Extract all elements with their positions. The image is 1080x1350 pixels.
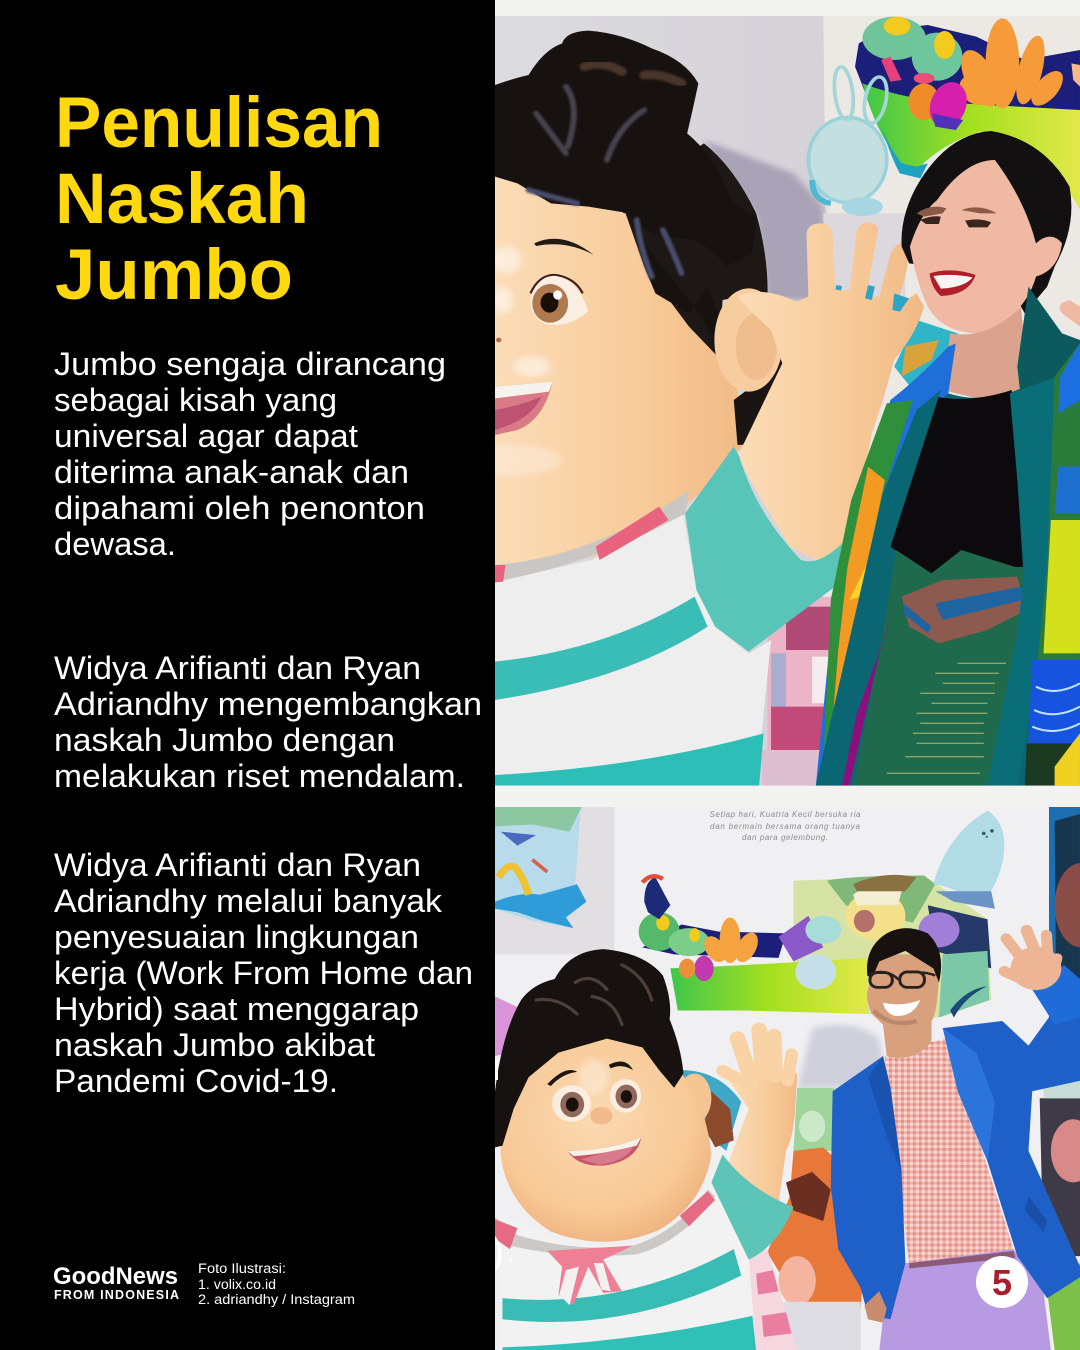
mascot hair (495, 30, 700, 303)
text block: paragraph 2: Adriandhy mengembangkan (54, 686, 482, 722)
page number badge: 5 (992, 1262, 1012, 1303)
wall caption illustration (639, 811, 1004, 1018)
mascot plaid behind (762, 597, 838, 787)
wall caption text: dan para gelembung. (742, 833, 828, 842)
mascot sleeve (685, 447, 846, 652)
mascot head (495, 177, 749, 567)
mascot plaid sleeve (749, 1249, 797, 1350)
text block: paragraph 3: Pandemi Covid-19. (54, 1063, 338, 1099)
wall (495, 16, 1080, 786)
page number badge (976, 1256, 1028, 1308)
mascot hair back (618, 143, 768, 363)
text block: paragraph 3: Adriandhy melalui banyak (54, 883, 443, 919)
text block: paragraph 1: dewasa. (54, 526, 176, 562)
mascot mouth (495, 382, 553, 435)
woman jacket left lapel (816, 390, 941, 786)
title: Naskah (55, 160, 309, 239)
woman face (910, 160, 1062, 400)
photo 1: woman with mascot (465, 16, 1080, 787)
wall illustration (808, 17, 1080, 390)
photo 2: man with mascot (495, 807, 1080, 1350)
man head (867, 928, 941, 1058)
wall art left (495, 807, 586, 1056)
text block: paragraph 1: universal agar dapat (54, 418, 358, 454)
dark gap behind ear (734, 350, 790, 445)
logo: GoodNews from Indonesia: FROM INDONESIA (54, 1288, 179, 1302)
wall caption text: dan bermain bersama orang tuanya (710, 822, 861, 831)
mascot shirt (495, 490, 771, 786)
text block: paragraph 1: dipahami oleh penonton (54, 490, 425, 526)
right dark poster (1040, 807, 1080, 1350)
wall caption text (710, 810, 861, 842)
mascot forehead highlight (579, 1060, 609, 1095)
mascot ear (714, 288, 783, 392)
title: Penulisan (55, 84, 383, 163)
man blazer (831, 965, 1080, 1319)
logo: GoodNews from Indonesia: GoodNews (53, 1263, 178, 1290)
text block: paragraph 3: kerja (Work From Home dan (54, 955, 473, 991)
text block: paragraph 2 (54, 650, 482, 794)
man trousers (879, 1249, 1051, 1350)
text block: paragraph 1: Jumbo sengaja dirancang (54, 346, 446, 382)
title: Jumbo (55, 236, 293, 315)
photo credits (198, 1261, 355, 1307)
mascot sleeve (711, 1154, 793, 1260)
lower wall poster (682, 1070, 868, 1350)
mascot hair (495, 949, 683, 1147)
text block: paragraph 3: Hybrid) saat menggarap (54, 991, 419, 1027)
photo credits: Foto Ilustrasi: (198, 1261, 286, 1276)
panel: text column (53, 84, 482, 1307)
jacket right pattern (1025, 300, 1080, 786)
text block: paragraph 3: naskah Jumbo akibat (54, 1027, 375, 1063)
mascot waving hand and arm (738, 222, 924, 563)
woman jacket and dress (816, 287, 1080, 786)
mascot head (501, 1035, 711, 1242)
man hand in pocket (864, 1291, 887, 1323)
mascot waving arm (723, 1030, 797, 1204)
text block: paragraph 1: diterima anak-anak dan (54, 454, 409, 490)
wall caption text: Setiap hari, Kuatria Kecil bersuka ria (710, 810, 861, 819)
stray text fragments on photo edge (495, 1060, 512, 1272)
mascot cheek highlights (495, 245, 562, 476)
photo credits: 1. volix.co.id (198, 1277, 276, 1292)
text block: paragraph 1 (54, 346, 446, 562)
title (55, 84, 383, 315)
panel: photo column background (495, 0, 1080, 1350)
logo: GoodNews from Indonesia (53, 1263, 179, 1302)
mascot eye (496, 239, 594, 342)
wall (495, 807, 886, 1090)
woman jacket right lapel (987, 377, 1058, 786)
text block: paragraph 3 (54, 847, 473, 1099)
text block: paragraph 2: naskah Jumbo dengan (54, 722, 395, 758)
man raised hand (1004, 931, 1061, 990)
woman hair (902, 131, 1071, 313)
text block: paragraph 3: penyesuaian lingkungan (54, 919, 419, 955)
text block: paragraph 2: melakukan riset mendalam. (54, 758, 465, 794)
text block: paragraph 2: Widya Arifianti dan Ryan (54, 650, 421, 686)
mascot face (547, 1062, 641, 1166)
mascot shirt (495, 1182, 756, 1350)
text block: paragraph 1: sebagai kisah yang (54, 382, 337, 418)
text block: paragraph 3: Widya Arifianti dan Ryan (54, 847, 421, 883)
man shirt (885, 1039, 1015, 1268)
mascot ear (685, 1074, 712, 1118)
photo credits: 2. adriandhy / Instagram (198, 1292, 355, 1307)
